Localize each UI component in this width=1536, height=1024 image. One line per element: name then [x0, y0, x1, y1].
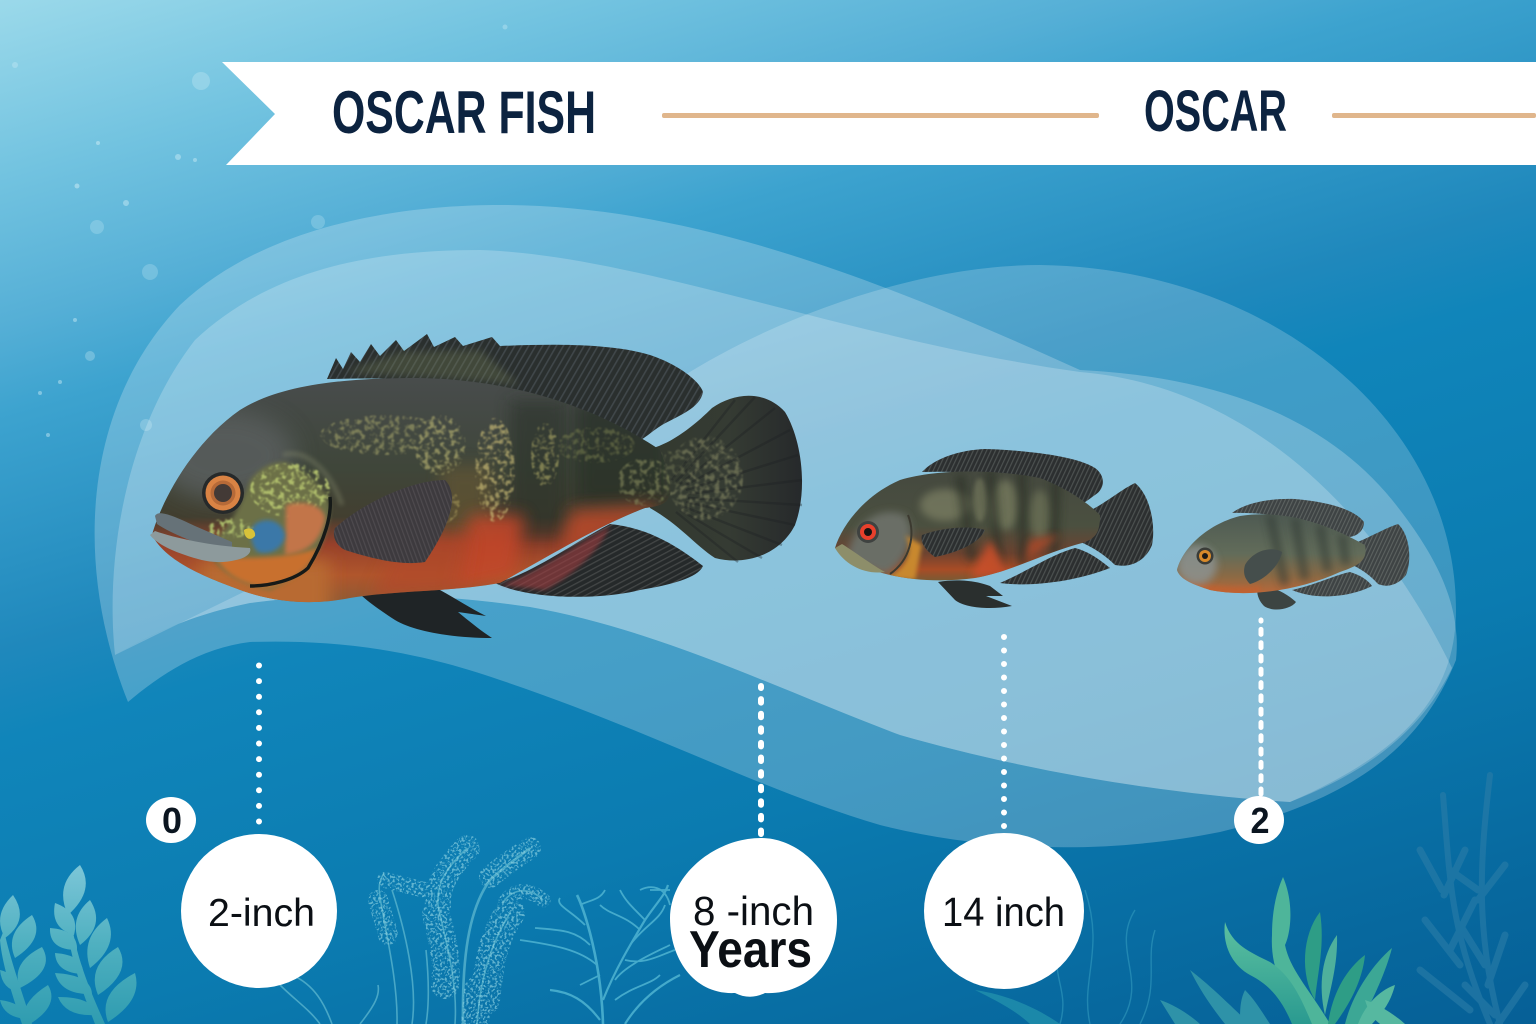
small juvenile oscar fish: [1177, 499, 1409, 609]
faint strands near middle: [1057, 890, 1155, 1024]
seaweed stalks: [280, 848, 543, 1024]
circle: 14 inch: 14 inch: [942, 889, 1065, 935]
marker 0: 0: [162, 800, 182, 841]
marker 0: [146, 797, 196, 843]
dorsal fin sheen: [345, 350, 520, 385]
anal fin red base: [500, 526, 610, 590]
body bands: [845, 470, 1060, 580]
left teal fern: [0, 865, 136, 1024]
header banner: [222, 62, 1536, 165]
label: 8-inch: 8 -inch: [693, 888, 814, 934]
seaweed lace: [378, 848, 543, 1024]
pectoral fin: [1244, 549, 1282, 584]
tail: [1348, 524, 1409, 586]
dark blue background plants: [1420, 775, 1525, 1024]
divider line left: [662, 113, 1099, 118]
mouth and lips: [150, 513, 250, 562]
anal fin: [495, 524, 703, 597]
subtitle: OSCAR: [1144, 79, 1287, 144]
eye: [1196, 548, 1214, 564]
translucent wave: outer shape: [95, 205, 1457, 847]
label: Years: Years: [689, 921, 812, 979]
connector: 8-inch dotted line: [758, 686, 764, 834]
dorsal fin: [327, 334, 703, 446]
medium oscar fish: [835, 449, 1153, 608]
ventral fins: [360, 587, 492, 638]
circle: 2-inch: 2-inch: [208, 892, 315, 935]
gill cover: [205, 454, 342, 590]
low teal grass: [975, 990, 1060, 1024]
lips: [835, 544, 885, 573]
pectoral fin: [922, 528, 985, 557]
body markings: [171, 399, 670, 602]
anal fin: [1000, 548, 1110, 584]
circle: 2-inch: [181, 834, 337, 988]
pectoral fin: [334, 480, 452, 563]
body: [152, 378, 671, 602]
ventral fin: [1257, 587, 1296, 609]
ventral fin: [938, 580, 1012, 608]
marker 2: [1234, 796, 1284, 844]
connector: 14 inch dotted line: [1001, 630, 1007, 826]
marker 2: 2: [1250, 800, 1270, 841]
anal fin: [1292, 572, 1372, 596]
green kelp: [1160, 877, 1405, 1024]
bubbles: [12, 24, 508, 437]
translucent wave: inner shape: [113, 250, 1452, 802]
connector: 2-inch dotted line: [256, 655, 262, 822]
body: [1177, 514, 1366, 593]
divider line right: [1332, 113, 1536, 118]
dorsal fin: [922, 449, 1103, 505]
large adult oscar fish: [150, 334, 802, 638]
title: OSCAR FISH: [332, 79, 596, 146]
banner ribbon: [222, 62, 1536, 165]
tail: [1075, 483, 1153, 566]
body: [835, 472, 1100, 580]
eye: [202, 472, 244, 514]
caudal tail: [632, 396, 802, 562]
circle: 14 inch: [924, 833, 1084, 989]
eye: [857, 521, 879, 543]
circle: 8-inch years: [670, 838, 837, 997]
translucent wave: right lobe: [115, 265, 1456, 802]
dorsal fin: [1232, 499, 1364, 537]
body bands: [1177, 515, 1346, 600]
pale lacy seaweed: [280, 848, 543, 1024]
gill edge: [890, 515, 911, 574]
connector: small fish dotted line: [1258, 620, 1264, 794]
branching coral plant: [520, 885, 680, 1024]
